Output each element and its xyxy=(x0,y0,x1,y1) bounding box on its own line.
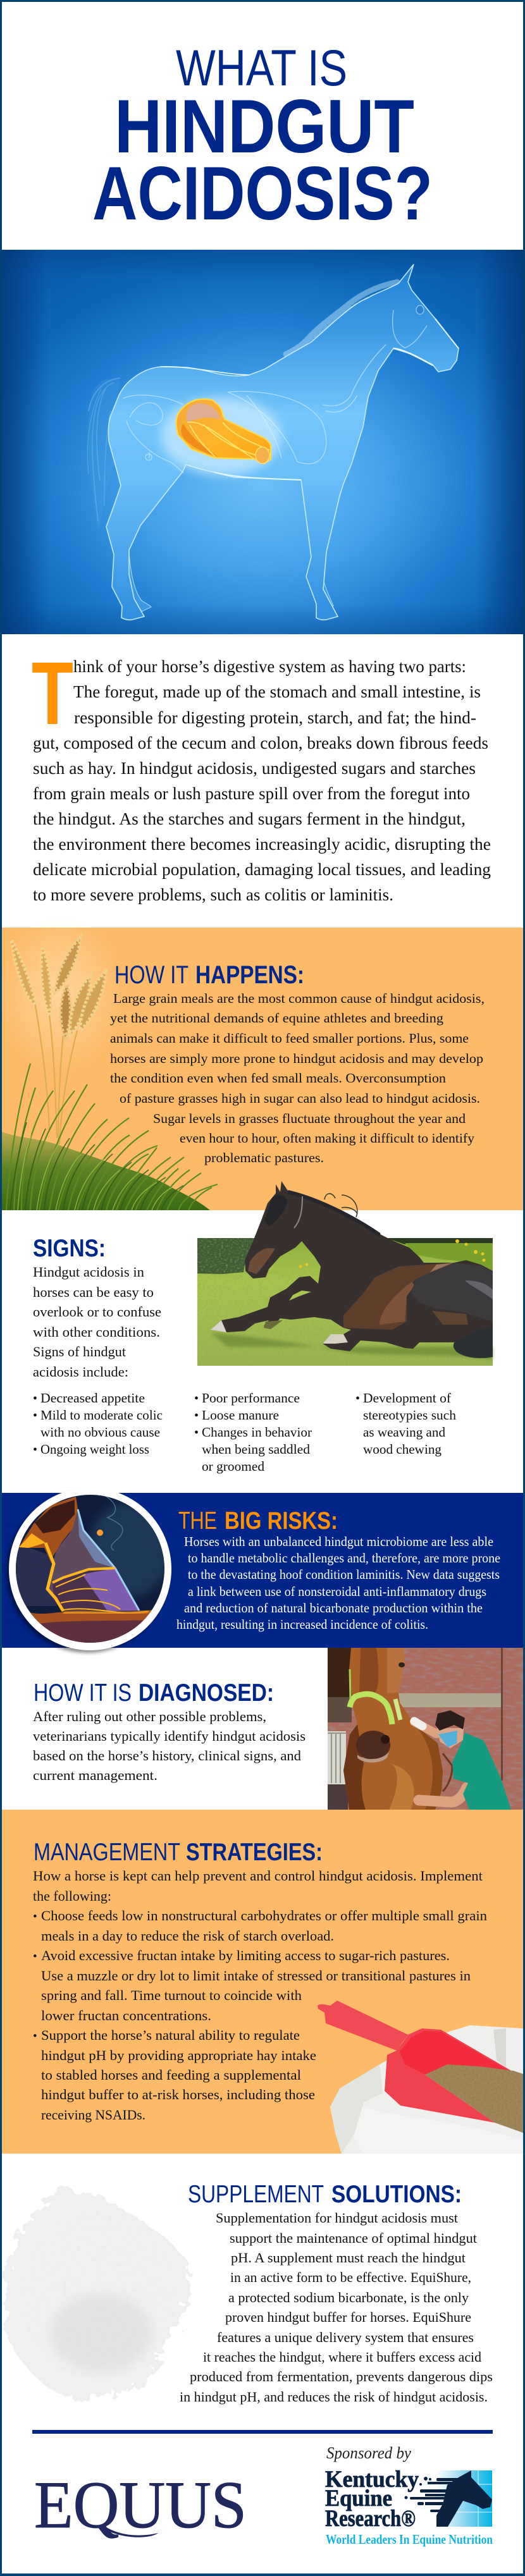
bullet list: column 2: or groomed xyxy=(202,1459,264,1474)
body text: After ruling out other possible problems, xyxy=(33,1708,266,1724)
bag xyxy=(330,2025,523,2154)
intro paragraph: such as hay. In hindgut acidosis, undigested sugars and starches xyxy=(33,759,476,778)
bullet list: column 1 xyxy=(33,1390,163,1457)
horse body xyxy=(106,264,459,620)
bullet list: column 3: wood chewing xyxy=(363,1442,442,1457)
circle shadow xyxy=(6,1491,168,1653)
logo: EQUUS: EQUUS xyxy=(34,2468,247,2542)
hindgut glow xyxy=(161,397,281,475)
body text: a link between use of nonsteroidal anti-inflammatory drugs xyxy=(188,1584,486,1599)
heading xyxy=(178,1507,338,1535)
body text: pH. A supplement must reach the hindgut xyxy=(231,2250,466,2266)
heading xyxy=(34,1679,274,1707)
bright outlines xyxy=(161,319,459,480)
body text: current management. xyxy=(33,1767,158,1783)
bullet list: column 1: • xyxy=(33,1392,37,1406)
body text: Choose feeds low in nonstructural carbohydrates or offer multiple small grain xyxy=(41,1908,487,1923)
bullet list: column 2: • xyxy=(194,1409,199,1423)
icon: burning hoof in circle xyxy=(9,1488,171,1650)
body text: meals in a day to reduce the risk of starch overload. xyxy=(41,1928,334,1944)
wheat glow xyxy=(0,914,123,1072)
body text: Large grain meals are the most common cause of hindgut acidosis, xyxy=(113,991,485,1006)
sponsor block: Sponsored by xyxy=(326,2444,411,2462)
heading: MANAGEMENT xyxy=(34,1839,180,1866)
intro paragraph: delicate microbial population, damaging local tissues, and leading xyxy=(33,860,491,879)
tail xyxy=(87,378,120,531)
logo: Kentucky Equine Research: Research® xyxy=(325,2506,416,2532)
veterinarian xyxy=(443,1753,452,1791)
grass shadow xyxy=(211,1333,493,1359)
heading xyxy=(34,1839,323,1866)
panel: how it happens xyxy=(0,914,523,1210)
ground xyxy=(30,1610,152,1643)
body text: and reduction of natural bicarbonate production within the xyxy=(184,1600,483,1616)
hoofs xyxy=(211,1320,226,1332)
bullet list: column 2: Poor performance xyxy=(202,1390,300,1406)
bullet list: column 3: • xyxy=(355,1392,360,1406)
intro paragraph: the environment there becomes increasingly acidic, disrupting the xyxy=(33,835,491,854)
body text: produced from fermentation, prevents dangerous dips xyxy=(190,2369,493,2384)
yellow flowers xyxy=(299,1239,486,1268)
panel: the big risks xyxy=(2,1488,523,1653)
body text xyxy=(33,1264,161,1380)
bullet list: column 3: Development of xyxy=(363,1390,451,1406)
inner anatomy lines xyxy=(123,310,427,473)
intro paragraph: The foregut, made up of the stomach and small intestine, is xyxy=(73,682,481,701)
body text xyxy=(176,1534,500,1632)
heading: SIGNS: xyxy=(33,1235,106,1262)
glowing veins xyxy=(46,1543,138,1614)
heading: HOW IT xyxy=(114,961,188,989)
title: HINDGUT xyxy=(114,84,414,169)
intro paragraph: from grain meals or lush pasture spill over from the foregut into xyxy=(33,784,470,803)
bullet list: column 1: with no obvious cause xyxy=(40,1425,160,1440)
body text: Horses with an unbalanced hindgut microbiome are less able xyxy=(184,1534,493,1549)
body text xyxy=(110,991,485,1165)
body text: Hindgut acidosis in xyxy=(33,1264,144,1280)
sponsor block xyxy=(325,2444,493,2547)
body text: • xyxy=(33,1950,37,1963)
bullet list: column 1: Mild to moderate colic xyxy=(40,1408,163,1423)
body text: horses are simply more prone to hindgut acidosis and may develop xyxy=(110,1051,483,1066)
photo: white powder pile xyxy=(3,2190,192,2400)
logo: Kentucky Equine Research: Equine xyxy=(325,2486,392,2512)
body text: to the devastating hoof condition laminitis. New data suggests xyxy=(188,1567,500,1582)
intro paragraph: gut, composed of the cecum and colon, breaks down fibrous feeds xyxy=(33,733,488,752)
heading: SUPPLEMENT xyxy=(188,2181,324,2208)
horse xyxy=(343,1648,443,1810)
heading: SOLUTIONS: xyxy=(331,2181,462,2208)
body text: • xyxy=(33,2030,37,2043)
horse silhouette xyxy=(211,1181,493,1351)
body text: • xyxy=(33,1910,37,1923)
muzzle xyxy=(356,1731,390,1760)
mane xyxy=(286,282,397,354)
body text xyxy=(180,2210,493,2405)
body text: proven hindgut buffer for horses. EquiShure xyxy=(225,2309,471,2325)
body text: Signs of hindgut xyxy=(33,1344,126,1359)
bullet list: column 2: • xyxy=(194,1392,199,1406)
body text: receiving NSAIDs. xyxy=(41,2107,145,2123)
body text: Supplementation for hindgut acidosis must xyxy=(216,2210,458,2226)
bullet list: column 1: Decreased appetite xyxy=(40,1390,145,1406)
heading: HOW IT IS xyxy=(34,1679,132,1707)
far legs xyxy=(129,550,334,612)
body text: spring and fall. Time turnout to coincide with xyxy=(41,1987,302,2003)
title: WHAT IS xyxy=(176,40,347,97)
photo: horse lying down xyxy=(197,1181,493,1366)
intro paragraph: responsible for digesting protein, starch, and fat; the hind- xyxy=(74,708,476,727)
panel: signs xyxy=(33,1181,493,1474)
icon: wheat stalks xyxy=(11,937,106,1144)
body text: hindgut buffer to at-risk horses, including those xyxy=(41,2087,315,2102)
halter xyxy=(350,1694,392,1724)
body text: the condition even when fed small meals. Overconsumption xyxy=(110,1070,447,1086)
scoop handle xyxy=(318,2001,408,2051)
bullet list: column 3 xyxy=(355,1390,457,1457)
body text: lower fructan concentrations. xyxy=(41,2008,211,2023)
bullet list: column 3: stereotypies such xyxy=(363,1408,457,1423)
intro paragraph: hink of your horse’s digestive system as having two parts: xyxy=(73,657,466,676)
body text: Support the horse’s natural ability to regulate xyxy=(41,2027,300,2043)
intro paragraph: the hindgut. As the starches and sugars ferment in the hindgut, xyxy=(33,809,466,828)
body text: features a unique delivery system that ensures xyxy=(217,2329,474,2345)
hair xyxy=(19,1497,78,1568)
logo: Kentucky Equine Research: World Leaders In Equine Nutrition xyxy=(326,2532,493,2547)
body text: a protected sodium bicarbonate, is the only xyxy=(228,2290,469,2305)
bullet list: column 3: as weaving and xyxy=(363,1425,445,1440)
heading: STRATEGIES: xyxy=(186,1839,323,1866)
stall xyxy=(328,1648,353,1697)
heading xyxy=(114,961,304,989)
body text: Avoid excessive fructan intake by limiting access to sugar-rich pastures. xyxy=(41,1947,450,1963)
gap between legs xyxy=(289,1291,311,1301)
body text: of pasture grasses high in sugar can also lead to hindgut acidosis. xyxy=(120,1091,480,1106)
heading: BIG RISKS: xyxy=(225,1507,338,1535)
stone band xyxy=(398,1693,501,1707)
body text: veterinarians typically identify hindgut acidosis xyxy=(33,1728,306,1744)
panel: how it is diagnosed xyxy=(33,1648,523,1810)
ember spot xyxy=(97,1530,103,1536)
heading: HAPPENS: xyxy=(195,961,304,989)
hero image: translucent horse with glowing hindgut xyxy=(2,250,523,634)
body text: it reaches the hindgut, where it buffers excess acid xyxy=(203,2349,481,2365)
panel: management strategies xyxy=(2,1810,523,2154)
hindgut organ xyxy=(176,399,271,463)
body text: with other conditions. xyxy=(33,1324,160,1340)
body text: hindgut, resulting in increased incidence of colitis. xyxy=(176,1617,428,1632)
body text: the following: xyxy=(33,1888,111,1904)
body text: animals can make it difficult to feed smaller portions. Plus, some xyxy=(110,1031,469,1046)
title: ACIDOSIS? xyxy=(92,151,433,236)
body text: overlook or to confuse xyxy=(33,1304,161,1320)
bullet list: column 2 xyxy=(194,1390,312,1474)
title xyxy=(92,40,433,236)
bullet list: column 2: Loose manure xyxy=(202,1408,279,1423)
body text: support the maintenance of optimal hindgut xyxy=(230,2230,477,2246)
body text xyxy=(33,1868,487,2123)
photo: veterinarian examining horse xyxy=(328,1648,523,1810)
body text: in an active form to be effective. EquiShure, xyxy=(230,2269,471,2285)
scoop bowl xyxy=(385,2028,514,2123)
body text: in hindgut pH, and reduces the risk of hindgut acidosis. xyxy=(180,2389,488,2405)
body text xyxy=(33,1708,306,1783)
heading: DIAGNOSED: xyxy=(139,1679,274,1707)
bullet list: column 2: when being saddled xyxy=(202,1442,311,1457)
body text: horses can be easy to xyxy=(33,1284,154,1300)
panel: supplement solutions xyxy=(3,2181,493,2405)
icon: grass xyxy=(2,1064,218,1210)
body text: hindgut pH by providing appropriate hay intake xyxy=(41,2047,316,2063)
feed pellets xyxy=(425,2064,523,2133)
body text: Sugar levels in grasses fluctuate throughout the year and xyxy=(153,1111,466,1126)
body text: acidosis include: xyxy=(33,1364,128,1380)
body text: to handle metabolic challenges and, therefore, are more prone xyxy=(188,1550,500,1566)
eye xyxy=(416,305,424,314)
intro paragraph: to more severe problems, such as colitis or laminitis. xyxy=(33,885,393,904)
body text: to stabled horses and feeding a supplemental xyxy=(41,2067,301,2083)
bullet list: column 1: • xyxy=(33,1409,37,1423)
bullet list: column 2: • xyxy=(194,1426,199,1440)
body text: Use a muzzle or dry lot to limit intake of stressed or transitional pastures in xyxy=(41,1968,471,1984)
bullet list: column 1: Ongoing weight loss xyxy=(40,1442,149,1457)
body text: problematic pastures. xyxy=(204,1150,324,1165)
bullet list: column 2: Changes in behavior xyxy=(202,1425,312,1440)
smoke xyxy=(104,1495,123,1550)
body text: yet the nutritional demands of equine athletes and breeding xyxy=(110,1010,444,1026)
logo: Kentucky Equine Research xyxy=(325,2467,493,2547)
body text: How a horse is kept can help prevent and control hindgut acidosis. Implement xyxy=(33,1868,483,1884)
tail xyxy=(454,1326,493,1358)
body text: even hour to hour, often making it difficult to identify xyxy=(180,1131,475,1146)
bullet list: column 1: • xyxy=(33,1443,37,1457)
photo: feed bag with red scoop xyxy=(318,2001,523,2154)
drop cap: T xyxy=(32,643,73,743)
pastern and hoof xyxy=(49,1511,112,1611)
body shading xyxy=(343,1263,454,1330)
intro paragraph xyxy=(32,643,491,904)
heading: THE xyxy=(178,1507,217,1535)
body text: based on the horse’s history, clinical signs, and xyxy=(33,1748,301,1763)
heading xyxy=(188,2181,462,2208)
logo: Kentucky Equine Research: Kentucky xyxy=(325,2467,419,2493)
